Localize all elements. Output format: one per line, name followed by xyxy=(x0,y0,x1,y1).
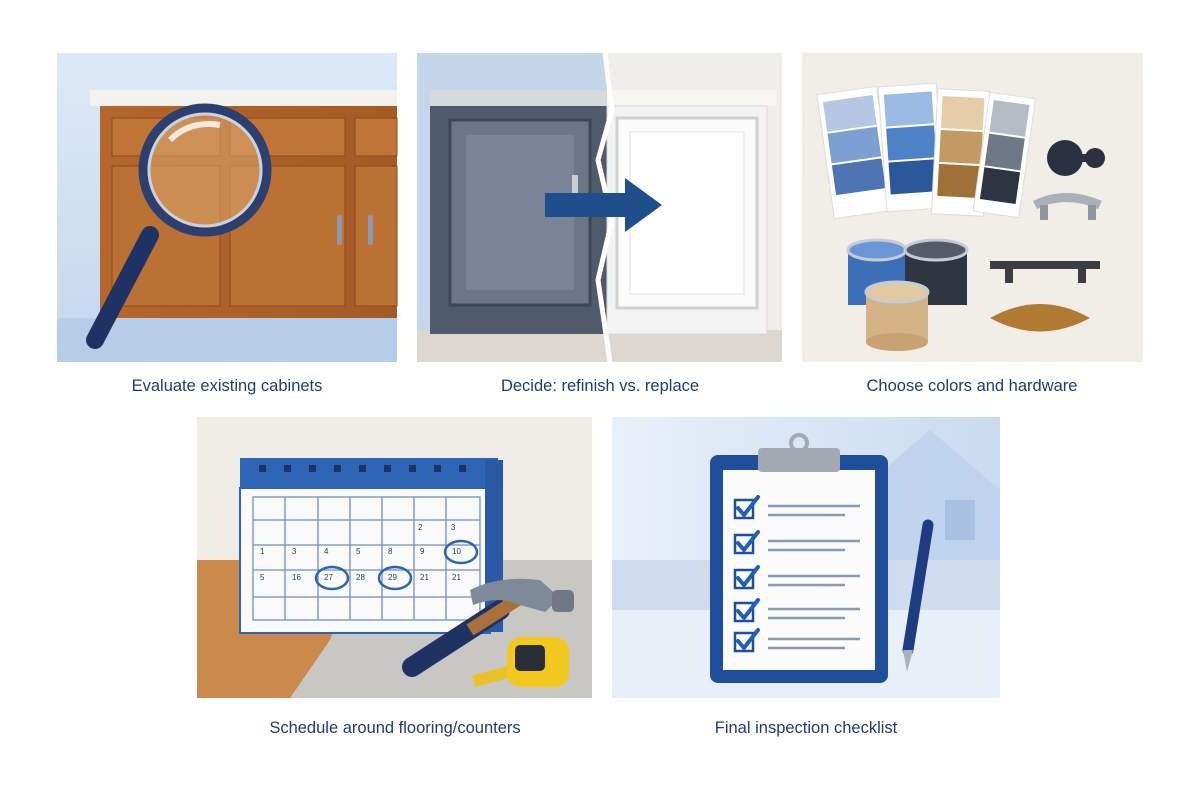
calendar: 28 xyxy=(356,573,365,582)
calendar: 4 xyxy=(324,547,329,556)
handle silver xyxy=(1035,198,1100,205)
calendar: 21 xyxy=(452,573,461,582)
caption: decide: Decide: refinish vs. replace xyxy=(501,377,699,395)
house outline xyxy=(860,430,1000,620)
knob xyxy=(1047,140,1105,176)
panel: colors and hardware xyxy=(802,53,1143,362)
calendar xyxy=(240,458,503,633)
icon: pen xyxy=(903,525,928,672)
calendar: 3 xyxy=(292,547,297,556)
cup pull bronze xyxy=(990,304,1090,332)
calendar: 10 xyxy=(452,547,461,556)
icon: tape measure xyxy=(472,637,569,687)
caption: evaluate: Evaluate existing cabinets xyxy=(132,377,322,395)
swatches xyxy=(817,83,1035,219)
cabinet xyxy=(100,106,397,318)
calendar: 1 xyxy=(260,547,265,556)
panel: final inspection xyxy=(612,417,1000,698)
panel: evaluate existing cabinets xyxy=(57,53,397,362)
paint cans xyxy=(848,240,967,351)
calendar: 27 xyxy=(324,573,333,582)
countertop xyxy=(90,90,397,106)
calendar: 21 xyxy=(420,573,429,582)
caption: schedule: Schedule around flooring/counters xyxy=(269,719,521,737)
wood floor xyxy=(197,560,360,698)
panel: schedule xyxy=(197,417,592,698)
icon: magnifying glass xyxy=(95,108,267,340)
calendar: 9 xyxy=(420,547,425,556)
new cabinet xyxy=(607,90,777,334)
calendar: 16 xyxy=(292,573,301,582)
old cabinet xyxy=(430,90,607,334)
arrow xyxy=(545,178,662,232)
icon: hammer xyxy=(412,579,574,667)
panel: refinish vs replace xyxy=(417,53,782,362)
caption: choose: Choose colors and hardware xyxy=(867,377,1077,395)
clipboard xyxy=(710,435,888,683)
calendar: 8 xyxy=(388,547,393,556)
calendar: 2 xyxy=(418,523,423,532)
calendar: 5 xyxy=(356,547,361,556)
calendar: 29 xyxy=(388,573,397,582)
caption: final: Final inspection checklist xyxy=(715,719,898,737)
divider zigzag xyxy=(598,53,612,362)
calendar: 5 xyxy=(260,573,265,582)
calendar: 3 xyxy=(451,523,456,532)
handle black xyxy=(990,261,1100,269)
